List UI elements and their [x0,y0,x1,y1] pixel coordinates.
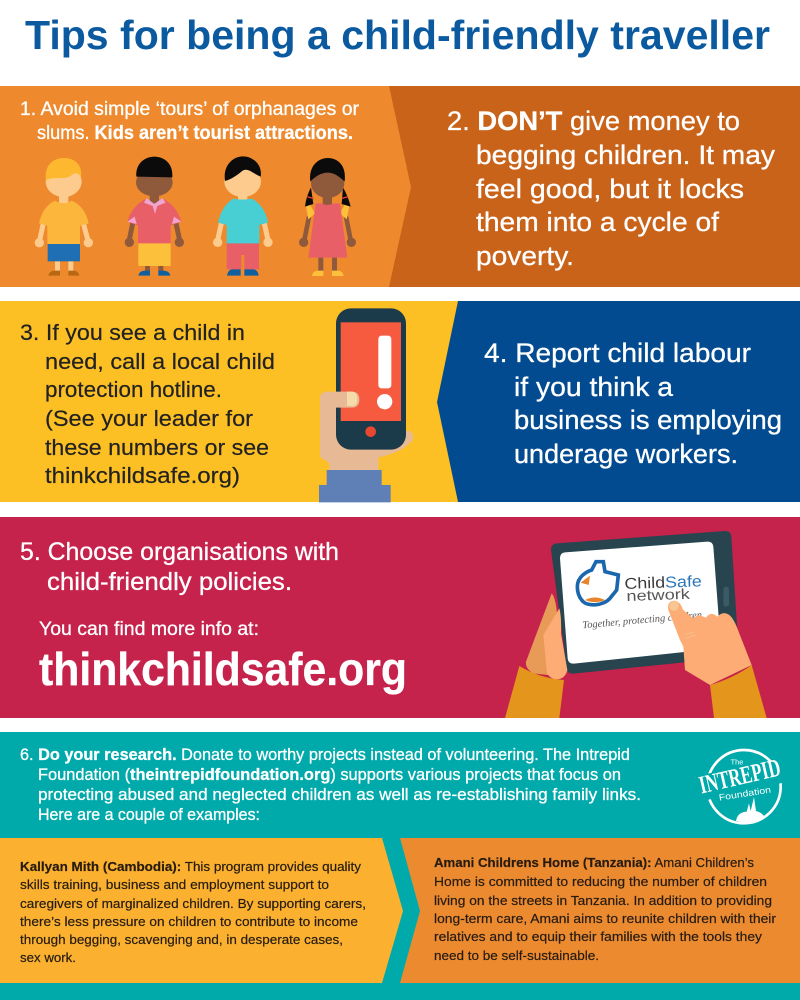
child 3 [213,156,273,276]
child 4 [299,158,356,276]
title: Tips for being a child-friendly traveller [25,12,770,58]
tip 2 text: 2. DON’T give money to [447,106,740,136]
example: Amani Childrens Home: long-term care, Amani aims to reunite children with their [434,911,777,926]
tip 6 text: protecting abused and neglected children as well as re-establishing family links. [38,785,641,804]
tip 2 text: poverty. [476,241,574,271]
tip 5 text: 5. Choose organisations with [20,538,339,566]
tip 4 text: 4. Report child labour [484,338,751,368]
tip 3 text: need, call a local child [45,349,275,374]
tip 5 text: You can find more info at: [39,618,259,640]
tip 3 text: these numbers or see [45,435,269,460]
tip 2 text: them into a cycle of [476,207,720,237]
icon: hand holding phone with alert [319,308,413,502]
tip 1 text: 1. Avoid simple ‘tours’ of orphanages or [20,99,360,120]
tip 5 text [20,538,407,695]
panel: tip 6 [0,732,800,1000]
logo: The Intrepid Foundation: Foundation [718,785,772,803]
tip 3 text: protection hotline. [45,377,222,402]
child 2 [125,157,184,276]
child 1 [35,158,93,276]
tip 4 text: underage workers. [514,439,738,469]
logo: The Intrepid Foundation [693,750,795,823]
example: Amani Childrens Home: need to be self-sustainable. [434,948,599,963]
panel: tip 5 [0,517,800,718]
tip 4 text: business is employing [514,405,782,435]
example: Amani Childrens Home: living on the streets in Tanzania. In addition to providing [434,893,772,908]
tip 5 text: child-friendly policies. [47,568,292,596]
example: Amani Childrens Home: Home is committed to reducing the number of children [434,874,767,889]
tip 2 text [447,106,776,271]
example: Amani Childrens Home [400,838,800,983]
tip 6 text [20,745,641,824]
tip 3 text [20,320,275,488]
example: Kallyan Mith: caregivers of marginalized children. By supporting carers, [20,896,366,911]
example: Amani Childrens Home: Amani Childrens Home (Tanzania): Amani Children’s [434,855,755,870]
example: Amani Childrens Home: relatives and to equip their families with the tools they [434,929,763,944]
logo: The Intrepid Foundation: The [731,757,743,766]
example: Kallyan Mith: there’s less pressure on children to contribute to income [20,914,358,929]
tip 6 text: 6. Do your research. Donate to worthy projects instead of volunteering. The Intrepid [20,745,630,764]
tip 2 text: feel good, but it locks [476,174,744,204]
tip 6 text: Here are a couple of examples: [38,805,260,824]
tip 4 text: if you think a [514,372,674,402]
panel: tips 3 and 4 [0,301,800,502]
tip 3 text: 3. If you see a child in [20,320,245,345]
ChildSafe logo: ChildSafe [624,573,702,593]
icons: four children [35,156,356,276]
ChildSafe logo [577,562,702,631]
example: Kallyan Mith [0,838,403,983]
panel: tips 1 and 2 [0,86,800,287]
tip 3 text: thinkchildsafe.org) [45,463,240,488]
icon: hands holding tablet with ChildSafe network logo [505,531,767,718]
tip 5 text: thinkchildsafe.org [39,643,407,695]
example: Kallyan Mith: sex work. [20,950,76,965]
example: Kallyan Mith: through begging, scavenging and, in desperate cases, [20,932,343,947]
example: Kallyan Mith: Kallyan Mith (Cambodia): This program provides quality [20,859,362,874]
tip 1 text: slums. Kids aren’t tourist attractions. [37,123,353,144]
tip 3 text: (See your leader for [45,406,254,431]
ChildSafe logo: Together, protecting children [582,610,702,631]
ChildSafe logo: network [626,587,691,605]
tip 4 text [484,338,782,469]
tip 6 text: Foundation (theintrepidfoundation.org) supports various projects that focus on [38,765,621,784]
example: Kallyan Mith: skills training, business and employment support to [20,877,329,892]
tip 1 text [20,99,360,144]
tip 2 text: begging children. It may [476,140,776,170]
